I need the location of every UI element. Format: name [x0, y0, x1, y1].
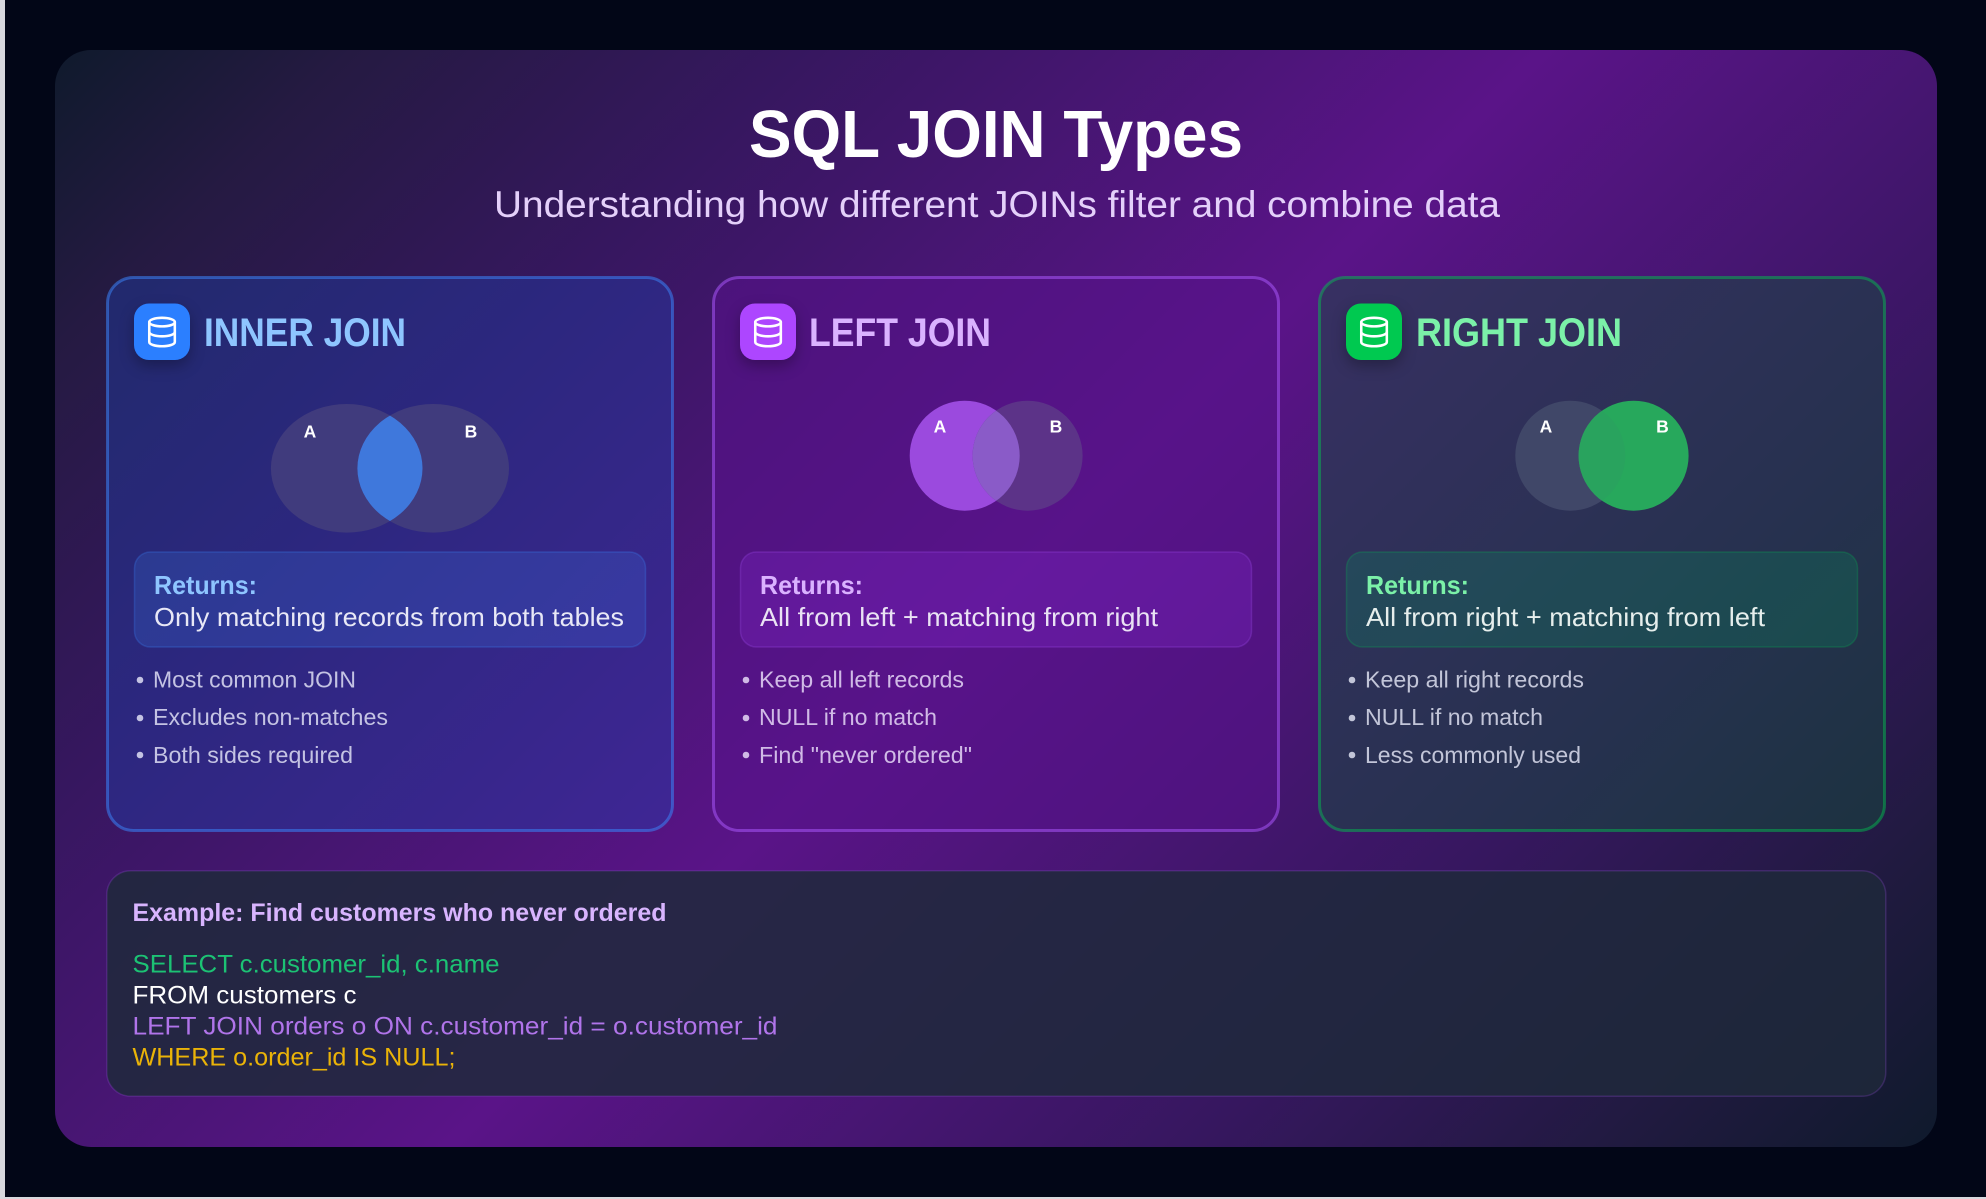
panel: right join — [1320, 278, 1884, 830]
heading: left join: LEFT JOIN — [809, 311, 991, 355]
icon: purple database — [740, 304, 796, 360]
venn diagram: inner join: B — [465, 422, 477, 442]
returns box: left join: All from left + matching from right — [760, 602, 1159, 632]
title: SQL JOIN Types — [749, 97, 1243, 172]
bullet list: left join: NULL if no match — [759, 704, 937, 730]
returns box: inner join — [134, 552, 646, 647]
heading: right join: RIGHT JOIN — [1416, 311, 1622, 355]
returns box: right join: All from right + matching from left — [1366, 602, 1766, 632]
bullet list: inner join: Both sides required — [153, 742, 353, 768]
bullet list: inner join: Most common JOIN — [153, 666, 356, 692]
icon: green database — [1346, 304, 1402, 360]
venn diagram: left join: B — [1050, 417, 1062, 437]
returns box: inner join: Returns: — [154, 570, 257, 600]
bullet list: right join: NULL if no match — [1365, 704, 1543, 730]
bullet list: right join: Keep all right records — [1365, 666, 1584, 692]
returns box: left join — [740, 552, 1252, 647]
bullet list: inner join — [137, 666, 388, 768]
venn diagram: inner join: A — [304, 422, 317, 442]
panel: sql example — [107, 871, 1886, 1096]
icon: blue database — [134, 304, 190, 360]
venn diagram: left join — [910, 401, 1083, 511]
heading: inner join: INNER JOIN — [204, 311, 406, 355]
venn diagram: right join — [1515, 401, 1689, 511]
subtitle: Understanding how different JOINs filter and combine data — [494, 184, 1500, 225]
code block — [132, 950, 777, 1072]
panel: inner join — [108, 278, 672, 830]
bullet list: right join: Less commonly used — [1365, 742, 1581, 768]
returns box: inner join: Only matching records from both tables — [154, 602, 624, 632]
code block: FROM customers c — [132, 982, 356, 1010]
returns box: left join: Returns: — [760, 570, 863, 600]
venn diagram: inner join — [271, 404, 509, 533]
venn diagram: right join: A — [1540, 417, 1553, 437]
example heading: Example: Find customers who never ordered — [132, 899, 666, 927]
returns box: right join: Returns: — [1366, 570, 1469, 600]
venn diagram: right join: B — [1656, 417, 1669, 437]
venn diagram: left join: A — [934, 417, 947, 437]
bullet list: right join — [1349, 666, 1584, 768]
returns box: right join — [1346, 552, 1858, 647]
bullet list: left join: Keep all left records — [759, 666, 964, 692]
bullet list: inner join: Excludes non-matches — [153, 704, 388, 730]
bullet list: left join — [743, 666, 972, 768]
code block: WHERE o.order_id IS NULL; — [132, 1044, 456, 1072]
code block: SELECT c.customer_id, c.name — [132, 950, 500, 978]
panel: left join — [714, 278, 1278, 830]
code block: LEFT JOIN orders o ON c.customer_id = o.customer_id — [132, 1012, 777, 1040]
bullet list: left join: Find "never ordered" — [759, 742, 972, 768]
